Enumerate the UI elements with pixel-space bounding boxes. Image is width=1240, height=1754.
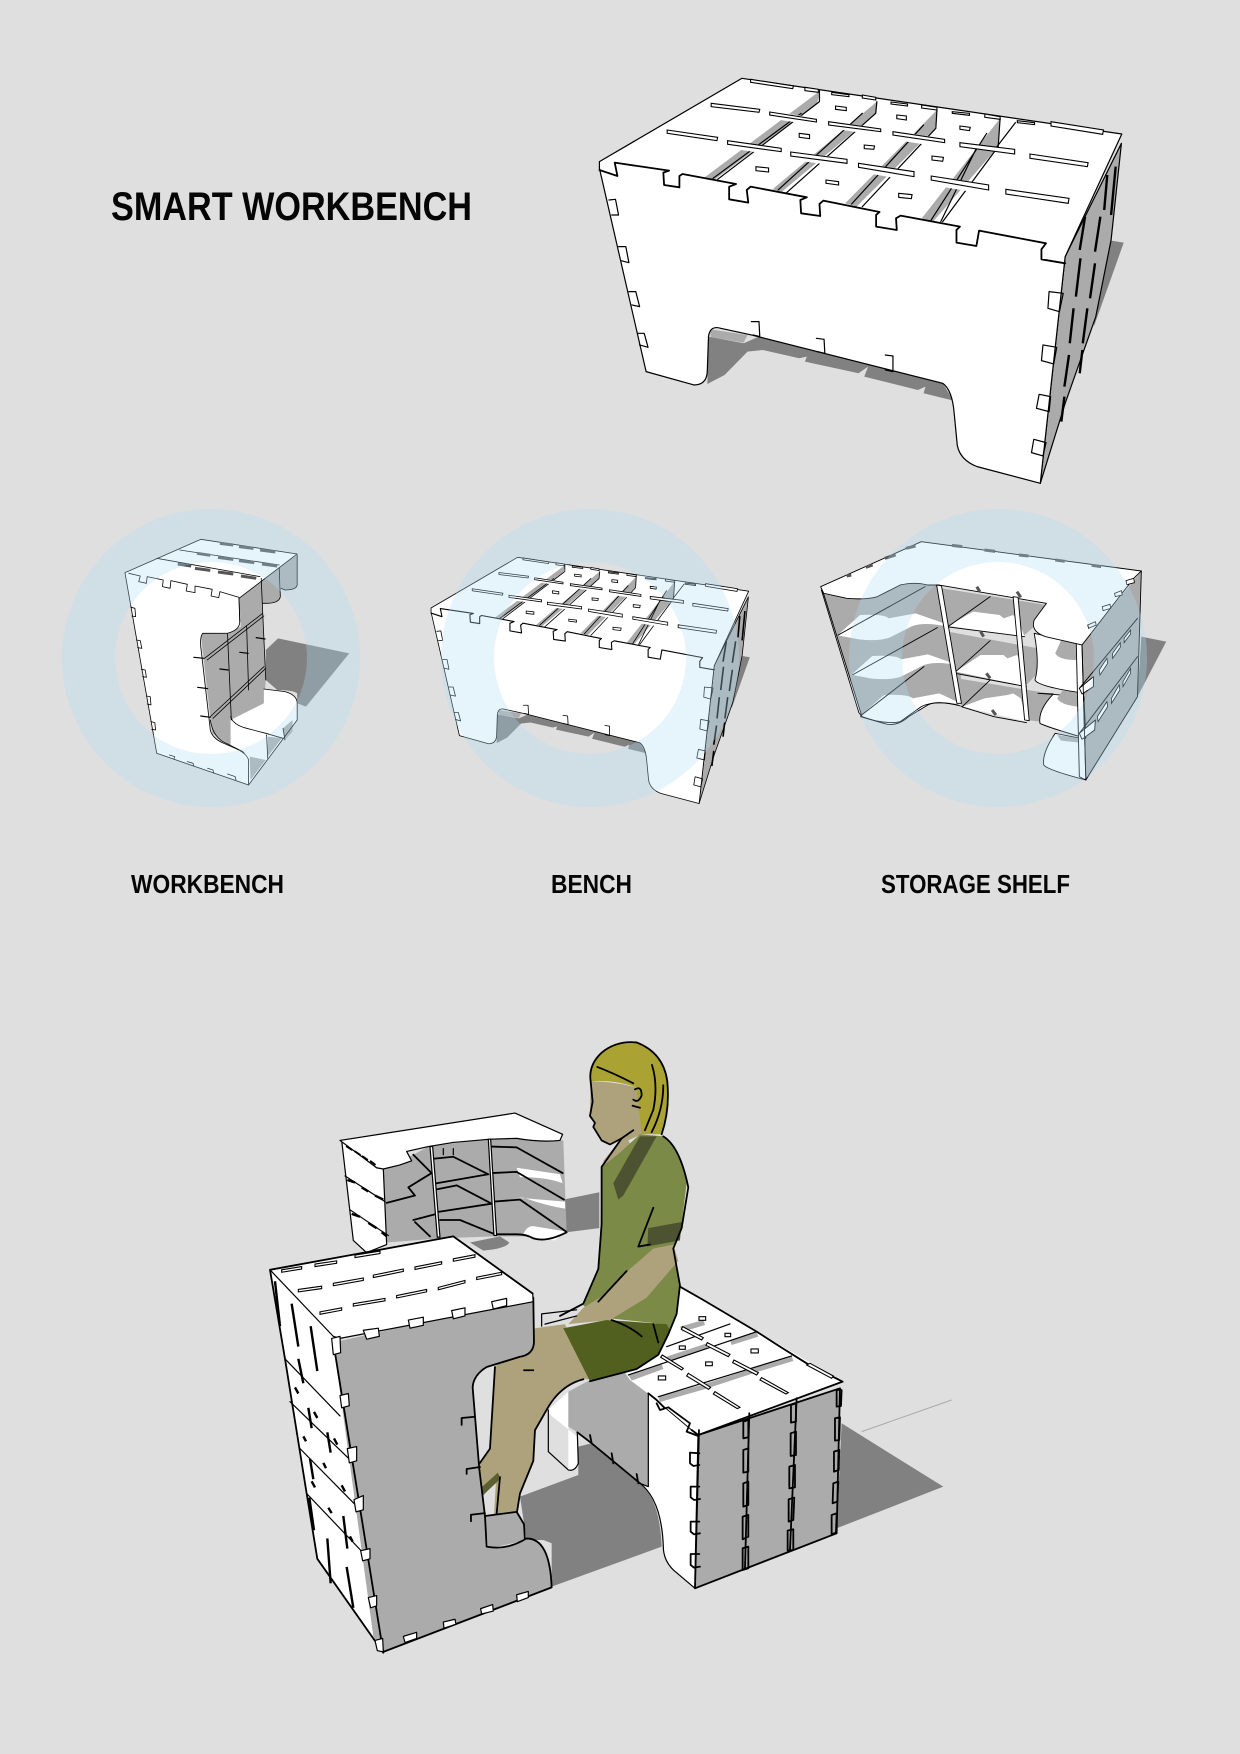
illustration: ground shadows [520, 1400, 952, 1587]
illustration: storage shelf mode [821, 542, 1166, 780]
front leg [490, 1324, 590, 1514]
collar [613, 1136, 657, 1200]
top shelf [821, 542, 1141, 645]
white cross tabs over strips [719, 111, 989, 193]
illustration: workbench mode [125, 539, 349, 785]
ring highlight: bench [468, 536, 712, 780]
shorts [563, 1320, 670, 1381]
side tabs [609, 199, 1063, 456]
illustration: bench with person seated [548, 1287, 843, 1588]
desk slots [282, 1251, 502, 1314]
label: workbench: WORKBENCH [131, 869, 284, 899]
back leg [479, 1445, 502, 1516]
ring highlight: storage shelf [876, 536, 1120, 780]
illustration: desk in front [270, 1236, 552, 1653]
right compartments and leg [1034, 633, 1084, 693]
face and neck [590, 1081, 642, 1196]
desk side panel [270, 1270, 383, 1653]
front crenellated edge [599, 163, 1065, 263]
illustration: large smart workbench [599, 78, 1124, 483]
top slots [667, 79, 1103, 203]
shoe [485, 1512, 525, 1549]
hair [590, 1042, 668, 1134]
illustration: bench mode [431, 557, 750, 804]
dividers [937, 585, 1029, 721]
left compartments [824, 583, 945, 645]
middle compartments [942, 588, 1046, 637]
illustration: storage unit behind [340, 1113, 599, 1253]
sleeve band [647, 1222, 682, 1247]
recessed strips [705, 91, 1000, 222]
label: storage shelf: STORAGE SHELF [881, 869, 1070, 899]
title: SMART WORKBENCH [111, 185, 472, 229]
ring highlight: workbench [88, 536, 334, 780]
illustration: seated person [479, 1042, 688, 1549]
shirt [583, 1134, 687, 1334]
small holes [756, 106, 970, 199]
label: bench: BENCH [551, 869, 632, 899]
desk tabs [332, 1298, 507, 1355]
